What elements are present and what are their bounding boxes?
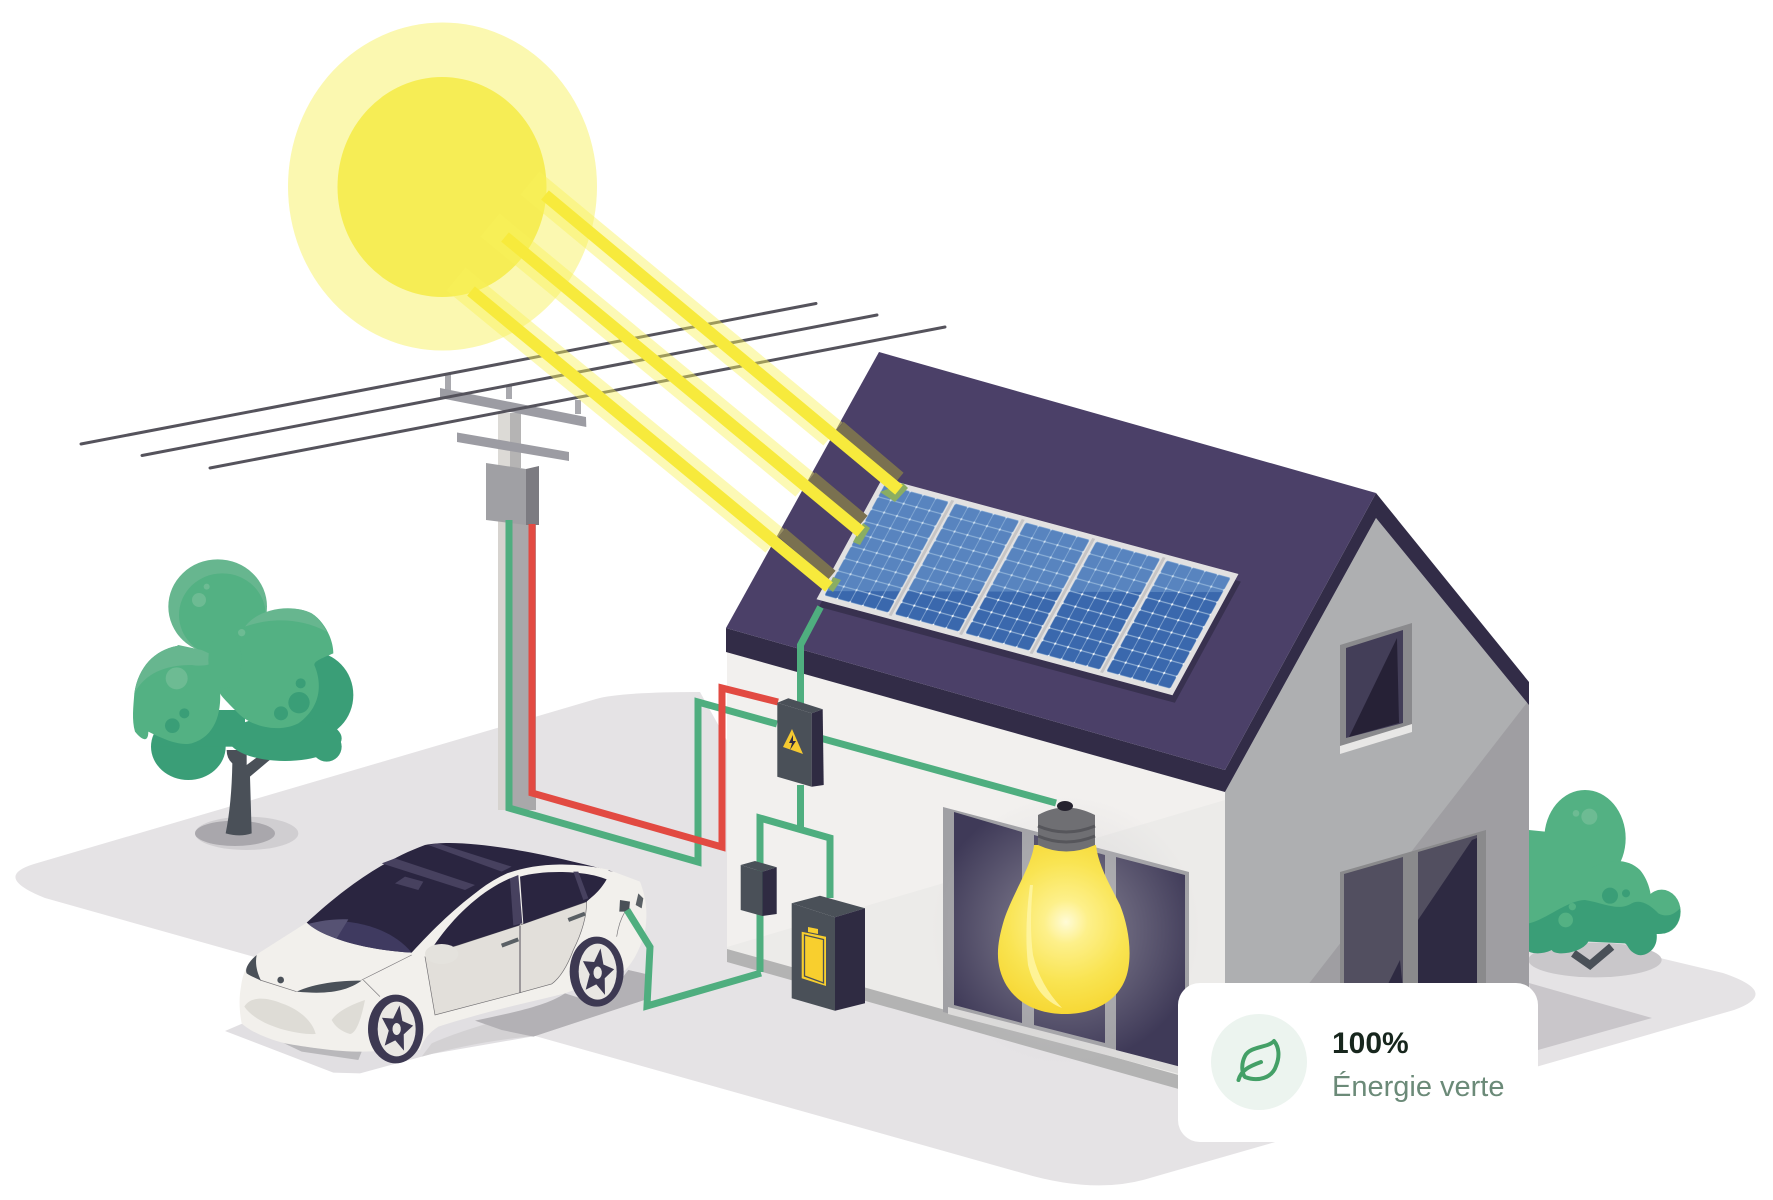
panel frame xyxy=(816,478,1238,695)
ray cores xyxy=(471,195,899,587)
utility pole xyxy=(440,373,586,810)
icon: warning triangle xyxy=(783,729,803,754)
door seam xyxy=(518,926,521,993)
ray reflections on roof xyxy=(782,426,900,575)
card label: Énergie verte xyxy=(1332,1070,1504,1103)
front windows xyxy=(930,795,1200,1076)
bush highlights xyxy=(1573,809,1597,825)
junction box xyxy=(777,698,824,787)
light foliage xyxy=(168,559,267,654)
ground plot xyxy=(15,692,1756,1185)
roof gable trim xyxy=(1225,493,1529,792)
power lines xyxy=(81,304,945,468)
meter box xyxy=(486,463,526,525)
grille xyxy=(244,999,316,1034)
roof highlights xyxy=(382,843,512,890)
ray ends on panel xyxy=(828,483,908,592)
door handles xyxy=(502,914,585,946)
icon: battery xyxy=(802,927,826,986)
pole shaft xyxy=(498,520,507,810)
front wheel xyxy=(368,995,423,1063)
bulb glass xyxy=(998,845,1130,1014)
sun core xyxy=(338,77,546,297)
car ground shadow xyxy=(225,963,646,1073)
sun halo xyxy=(288,22,597,350)
panel cells xyxy=(824,484,1231,689)
bush dark foliage xyxy=(1529,900,1680,955)
charge port xyxy=(619,900,630,912)
bush spots xyxy=(1602,888,1630,904)
upper cross arm xyxy=(440,388,586,427)
headlights xyxy=(297,981,362,993)
light bulb xyxy=(998,801,1130,1014)
hood lines xyxy=(260,955,412,997)
tree xyxy=(133,559,353,850)
right bush xyxy=(1528,790,1681,977)
plinth xyxy=(727,949,1225,1102)
bush shadow xyxy=(1528,943,1662,977)
trunk xyxy=(226,750,272,835)
front wall xyxy=(727,640,1225,1095)
mirror xyxy=(425,944,458,964)
sun rays xyxy=(456,183,908,592)
dark foliage xyxy=(151,652,353,780)
roof surface xyxy=(726,352,1376,770)
house shadow on ground xyxy=(1529,983,1652,1050)
foliage highlights xyxy=(166,584,245,689)
inverter box xyxy=(741,861,777,916)
roof and windscreen xyxy=(307,843,613,953)
panel shadow xyxy=(819,486,1241,703)
side windows xyxy=(428,878,520,954)
lower cross arm xyxy=(457,432,569,461)
card value: 100% xyxy=(1332,1027,1409,1060)
foliage spots xyxy=(165,678,310,733)
green wiring xyxy=(509,520,1056,1006)
bush light foliage xyxy=(1529,790,1681,934)
bulb screw cap xyxy=(1038,808,1095,852)
red wiring xyxy=(532,524,778,847)
side wall xyxy=(1225,518,1529,1101)
door panels xyxy=(425,902,587,1015)
icon: leaf xyxy=(1211,1014,1307,1110)
ray halos xyxy=(456,183,833,541)
insulators xyxy=(445,373,581,414)
car body xyxy=(240,843,646,1052)
home battery xyxy=(792,896,865,1011)
card background xyxy=(1178,983,1538,1142)
rear wheel xyxy=(570,937,624,1007)
stat card xyxy=(1178,983,1538,1142)
bulb highlight xyxy=(1026,885,1062,1008)
bulb cap nub xyxy=(1057,801,1073,811)
lower side window xyxy=(1340,830,1486,990)
bush stem xyxy=(1573,947,1612,965)
electric car xyxy=(240,843,646,1063)
roof line xyxy=(424,866,608,956)
roof fascia xyxy=(726,628,1225,792)
car underside xyxy=(270,1037,362,1060)
tree shadow xyxy=(195,817,298,850)
gable window xyxy=(1340,623,1412,754)
solar panels xyxy=(813,478,1244,703)
panel reflection xyxy=(827,486,1230,592)
sun xyxy=(288,22,597,350)
house xyxy=(726,352,1529,1102)
